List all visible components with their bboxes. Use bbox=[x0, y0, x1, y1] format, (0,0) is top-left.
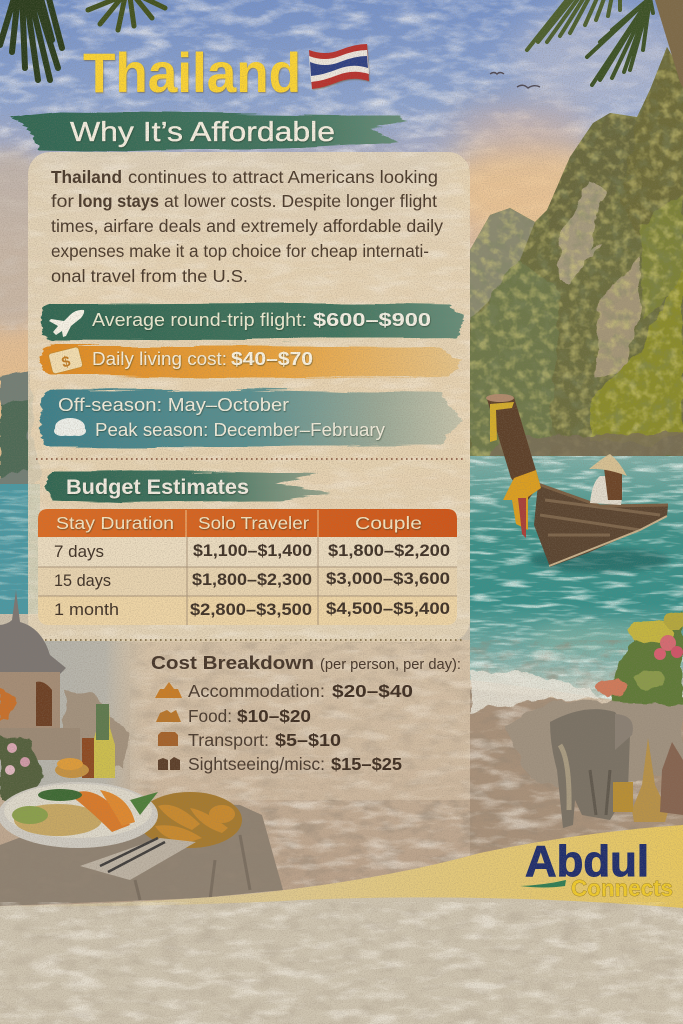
icon: hotel bbox=[155, 682, 182, 698]
elephant and rocks bbox=[505, 700, 683, 828]
table with food bbox=[0, 758, 290, 910]
intro paragraph: long stays bbox=[78, 191, 159, 211]
item: accommodation bbox=[155, 681, 413, 701]
table header bbox=[38, 509, 457, 537]
intro paragraph: expenses make it a top choice for cheap internati- bbox=[51, 241, 429, 261]
cost breakdown heading bbox=[151, 653, 461, 673]
temple bbox=[0, 590, 80, 760]
table rows: $4,500–$5,400 bbox=[326, 599, 450, 618]
icon: dollar note: $ bbox=[60, 353, 73, 372]
item: transport: Transport: bbox=[188, 730, 269, 750]
bottle and sauce bbox=[82, 704, 115, 778]
bar: daily living cost: $40–$70 bbox=[231, 349, 313, 369]
background: beach bbox=[0, 640, 683, 930]
cost breakdown bbox=[151, 653, 461, 774]
background: left hills and sea bbox=[0, 372, 40, 614]
bar: daily living cost bbox=[40, 346, 462, 378]
table header: Solo Traveler bbox=[198, 513, 309, 533]
heading brush: Budget Estimates bbox=[46, 470, 330, 503]
table rows: $2,800–$3,500 bbox=[190, 600, 312, 619]
table rows: $1,800–$2,200 bbox=[328, 541, 450, 560]
woman with hat bbox=[589, 454, 627, 505]
table header: Couple bbox=[355, 513, 422, 533]
item: sightseeing: Sightseeing/misc: bbox=[188, 754, 325, 774]
item: accommodation: Accommodation: bbox=[188, 681, 325, 701]
main plate pad thai bbox=[0, 782, 158, 848]
title text: Thailand bbox=[83, 41, 301, 104]
intro paragraph: for bbox=[51, 191, 74, 211]
title with flag bbox=[83, 41, 369, 104]
item: food: $10–$20 bbox=[237, 706, 311, 726]
flowers left bbox=[0, 690, 42, 800]
table rows: $3,000–$3,600 bbox=[326, 569, 450, 588]
table body bbox=[38, 537, 457, 625]
icon: dollar note bbox=[48, 346, 83, 374]
side plate with fried snacks bbox=[138, 792, 242, 848]
heading brush: Budget Estimates: Budget Estimates bbox=[66, 476, 249, 499]
icon: cloud bbox=[54, 418, 86, 436]
intro paragraph: times, airfare deals and extremely affordable daily bbox=[51, 216, 443, 236]
bar: average flight: Average round-trip flight: bbox=[92, 309, 307, 330]
long-tail boat bbox=[486, 394, 670, 572]
table header: Stay Duration bbox=[56, 513, 174, 533]
table rows: $1,100–$1,400 bbox=[193, 541, 312, 560]
table rows: $1,800–$2,300 bbox=[192, 570, 312, 589]
item: sightseeing: $15–$25 bbox=[331, 754, 402, 774]
icon: food bbox=[156, 710, 181, 722]
table rows bbox=[54, 541, 450, 619]
background: limestone cliffs bbox=[470, 40, 683, 460]
intro paragraph: continues to attract Americans looking bbox=[128, 167, 438, 187]
item: sightseeing bbox=[158, 754, 402, 774]
icon: sightseeing bbox=[158, 757, 180, 770]
bar: seasons: Off-season: May–October bbox=[58, 394, 289, 415]
item: transport bbox=[158, 730, 341, 750]
heading brush: Why It's Affordable: Why It’s Affordable bbox=[70, 116, 335, 147]
table rows: 7 days bbox=[54, 542, 104, 561]
logo: Abdul Connects: Abdul bbox=[525, 837, 649, 886]
golden stupas bbox=[613, 738, 683, 822]
cost breakdown heading: (per person, per day): bbox=[320, 657, 461, 673]
table rows: 1 month bbox=[54, 600, 119, 619]
intro paragraph: at lower costs. Despite longer flight bbox=[164, 191, 437, 211]
item: food bbox=[156, 706, 311, 726]
flowers right bbox=[597, 612, 683, 712]
icon: airplane bbox=[49, 310, 84, 337]
intro paragraph bbox=[51, 167, 443, 286]
bar: daily living cost: Daily living cost: bbox=[92, 349, 227, 369]
item: food: Food: bbox=[188, 706, 232, 726]
icon: Thai flag bbox=[309, 44, 369, 89]
bowl bbox=[55, 758, 89, 778]
cost breakdown heading: Cost Breakdown bbox=[151, 653, 314, 673]
icon: transport bbox=[158, 732, 178, 746]
palm fronds and trunk top right bbox=[527, 0, 683, 88]
translucent content panel bbox=[28, 152, 470, 800]
palm fronds top left bbox=[0, 0, 165, 80]
hazy town behind temple bbox=[0, 641, 150, 791]
birds bbox=[490, 72, 540, 88]
intro paragraph: onal travel from the U.S. bbox=[51, 266, 248, 286]
logo: Abdul Connects: Connects bbox=[571, 875, 673, 901]
bar: seasons bbox=[40, 390, 462, 448]
budget table bbox=[38, 509, 457, 625]
bottom paper with wave bbox=[0, 825, 683, 1024]
intro paragraph: Thailand bbox=[51, 167, 122, 187]
bar: average flight: $600–$900 bbox=[313, 309, 431, 330]
background: right sea bbox=[470, 456, 683, 701]
item: transport: $5–$10 bbox=[275, 730, 341, 750]
bar: seasons: Peak season: December–February bbox=[95, 419, 386, 440]
bar: average flight bbox=[41, 303, 466, 340]
heading brush: Why It's Affordable bbox=[10, 111, 408, 152]
napkin and cutlery bbox=[80, 838, 196, 880]
tablecloth bbox=[0, 801, 283, 906]
item: accommodation: $20–$40 bbox=[332, 681, 413, 701]
logo: Abdul Connects bbox=[520, 837, 673, 901]
table rows: 15 days bbox=[54, 571, 111, 590]
background: sky bbox=[0, 0, 683, 520]
